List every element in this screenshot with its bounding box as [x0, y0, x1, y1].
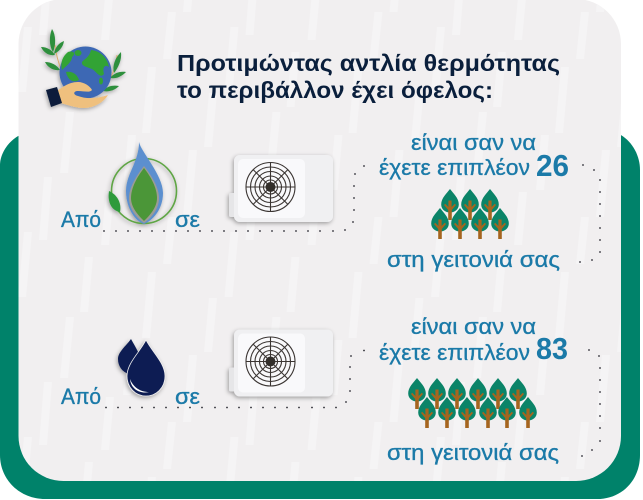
dotted connector, row one: [103, 165, 365, 232]
text: second comparison: 83: [536, 331, 568, 366]
dotted connector, row two: [105, 350, 365, 408]
trees: second group: [408, 378, 537, 428]
text: second comparison: στη γειτονιά σας: [387, 440, 559, 465]
text: second comparison: [379, 314, 568, 465]
text: second comparison: είναι σαν να: [411, 314, 536, 339]
text: second comparison: έχετε επιπλέον: [379, 340, 530, 365]
text: first comparison: στη γειτονιά σας: [387, 247, 560, 272]
text: first comparison: 26: [536, 148, 569, 183]
icon: heat pump outdoor unit, row two: [229, 330, 333, 396]
text: first comparison: [379, 130, 569, 272]
text: first comparison: έχετε επιπλέον: [379, 155, 530, 180]
title: Προτιμώντας αντλία θερμότητας: [177, 50, 560, 76]
dotted connector, row one right: [579, 164, 601, 263]
label: to: σε: [175, 207, 200, 232]
icon: heating-oil drops: [118, 339, 165, 396]
label: from: Από: [61, 207, 101, 232]
icon: globe held in a hand: [41, 29, 126, 108]
label: from, row two: Από: [61, 384, 101, 409]
icon: heat pump outdoor unit: [229, 155, 333, 222]
green background frame: [0, 130, 640, 499]
label: to, row two: σε: [175, 384, 200, 409]
text: first comparison: είναι σαν να: [411, 130, 536, 155]
icon: gas flame with leaf: [109, 142, 176, 224]
title: [177, 50, 560, 103]
dotted connector, row two right: [581, 349, 601, 457]
title: το περιβάλλον έχει όφελος:: [177, 77, 493, 103]
trees: first group: [431, 189, 509, 239]
